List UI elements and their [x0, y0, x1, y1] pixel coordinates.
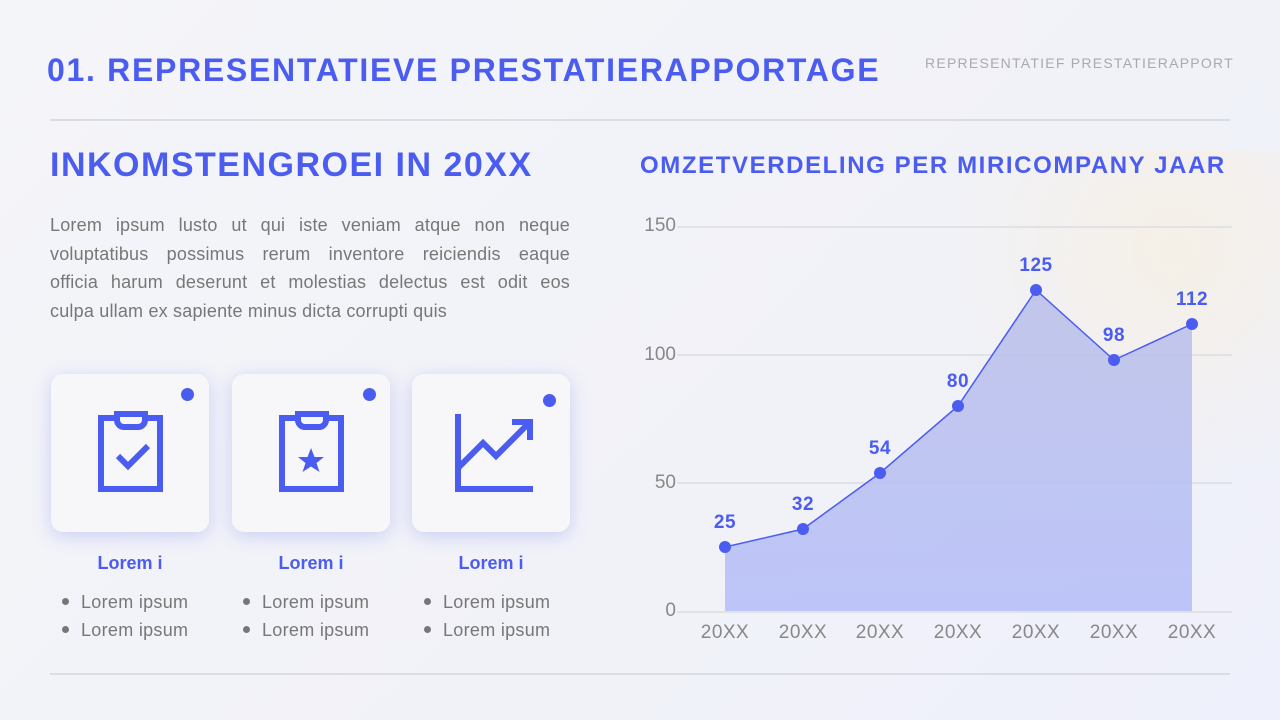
bullet list 1: Lorem ipsum [81, 620, 188, 640]
paragraph: Lorem ipsum lusto ut qui iste veniam atque non neque [50, 215, 570, 235]
area chart: 20XX [934, 622, 982, 643]
card 1: clipboard check [51, 374, 209, 532]
card labels: Lorem i [97, 553, 162, 573]
text: Lorem i [458, 553, 524, 573]
text: Lorem i [278, 553, 344, 573]
paragraph: voluptatibus possimus rerum inventore reiciendis eaque [50, 244, 570, 264]
area chart: 20XX [1090, 622, 1138, 643]
area chart: 98 [1103, 325, 1125, 346]
paragraph: culpa ullam ex sapiente minus dicta corrupti quis [50, 300, 447, 320]
card 2: clipboard star [232, 374, 390, 532]
area chart: 20XX [856, 622, 904, 643]
bullet list 1 [62, 592, 188, 640]
paragraph [50, 215, 570, 321]
area chart: 32 [792, 494, 814, 515]
area chart: 25 [714, 512, 736, 533]
title: 01. REPRESENTATIEVE PRESTATIERAPPORTAGE [47, 52, 880, 88]
area chart: 20XX [701, 622, 749, 643]
bullet list 2: Lorem ipsum [262, 620, 369, 640]
area chart: 54 [869, 438, 891, 459]
bullet list 3: Lorem ipsum [443, 592, 550, 612]
bullet list 2 [243, 592, 369, 640]
area chart: 112 [1176, 289, 1208, 310]
paragraph: officia harum deserunt et molestias delectus est odit eos [50, 272, 570, 292]
area chart: 20XX [1168, 622, 1216, 643]
area chart: 125 [1019, 255, 1053, 276]
bullet list 2: Lorem ipsum [262, 592, 369, 612]
bullet list 3: Lorem ipsum [443, 620, 550, 640]
subtitle top right: REPRESENTATIEF PRESTATIERAPPORT [925, 55, 1234, 71]
bullet list 3 [424, 592, 550, 640]
bullet list 1: Lorem ipsum [81, 592, 188, 612]
area chart: 20XX [779, 622, 827, 643]
area chart: 80 [947, 371, 969, 392]
area chart: 50 [655, 472, 676, 493]
area chart: 150 [644, 215, 676, 236]
chart title: OMZETVERDELING PER MIRICOMPANY JAAR [640, 152, 1226, 179]
area chart: 0 [665, 600, 676, 621]
heading left: INKOMSTENGROEI IN 20XX [50, 146, 533, 184]
area chart: 20XX [1012, 622, 1060, 643]
area chart: 100 [644, 344, 676, 365]
card 3: growth chart [412, 374, 570, 532]
